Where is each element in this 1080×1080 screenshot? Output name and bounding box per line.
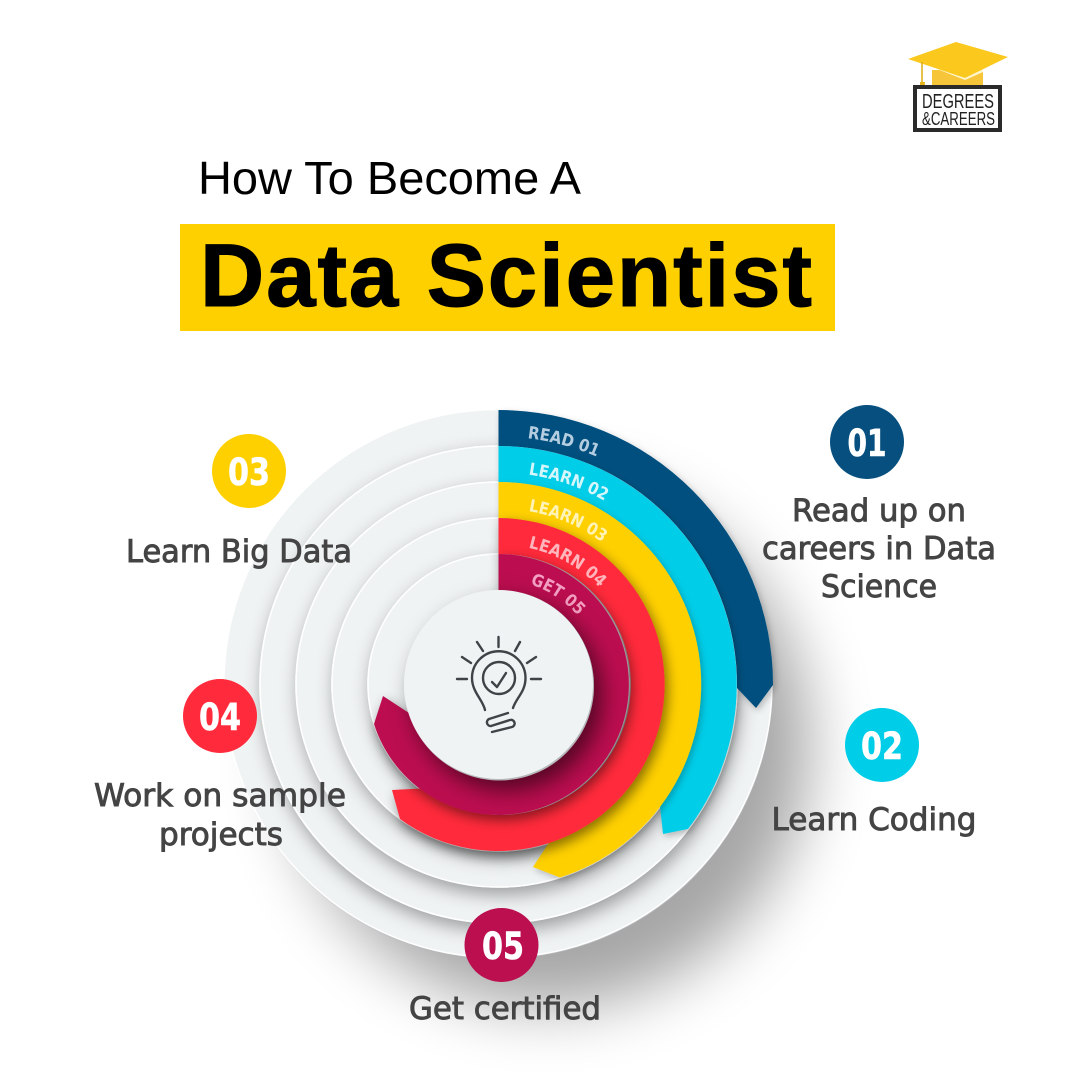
- step 05: [409, 908, 601, 1027]
- number badge 01: [830, 405, 904, 479]
- logo wordmark: [915, 87, 1000, 130]
- number badge 04: 04: [199, 696, 241, 739]
- step text 02: Learn Coding: [772, 802, 976, 838]
- band: read 01: [498, 410, 773, 708]
- number badge 04: [183, 679, 257, 753]
- band label: learn 04: LEARN 04: [530, 536, 607, 586]
- step text 04: projects: [159, 817, 283, 853]
- step text 03: Learn Big Data: [126, 534, 352, 570]
- step text 01: [762, 493, 996, 605]
- step 03: [126, 434, 352, 570]
- logo wordmark: &CAREERS: [922, 109, 995, 129]
- number badge 03: [212, 434, 286, 508]
- step 01: [762, 405, 996, 605]
- number badge 05: [464, 908, 538, 982]
- step text 01: Science: [821, 569, 937, 605]
- step text 01: careers in Data: [762, 531, 996, 567]
- band label: read 01: READ 01: [528, 426, 598, 456]
- band label: learn 02: LEARN 02: [530, 462, 608, 500]
- number badge 02: [845, 708, 919, 782]
- title highlight: Data Scientist: [200, 225, 812, 325]
- number badge 02: 02: [861, 725, 903, 768]
- title line: How To Become A: [198, 152, 581, 204]
- logo: [908, 42, 1008, 130]
- band: learn 02: [498, 446, 737, 834]
- step text 01: Read up on: [792, 493, 966, 529]
- step text 04: Work on sample: [94, 778, 346, 814]
- number badge 05: 05: [482, 925, 524, 968]
- logo wordmark: DEGREES: [922, 91, 994, 113]
- cast shadow: [285, 483, 809, 1007]
- step 02: [772, 708, 976, 838]
- step text 04: [94, 778, 346, 853]
- center disc: [404, 590, 594, 780]
- band: learn 04: [392, 518, 665, 851]
- step text 05: Get certified: [409, 991, 601, 1027]
- ring discs: [224, 410, 773, 959]
- number badge 03: 03: [228, 451, 270, 494]
- icon: light bulb with check: [457, 637, 541, 732]
- band label: learn 03: LEARN 03: [530, 499, 607, 540]
- band: learn 03: [498, 482, 701, 878]
- icon: graduation cap: [908, 42, 1008, 100]
- step 04: [94, 679, 346, 853]
- band label: get 05: GET 05: [532, 574, 586, 614]
- band: get 05: [374, 554, 629, 815]
- number badge 01: 01: [848, 422, 886, 465]
- radial diagram: [225, 410, 846, 1045]
